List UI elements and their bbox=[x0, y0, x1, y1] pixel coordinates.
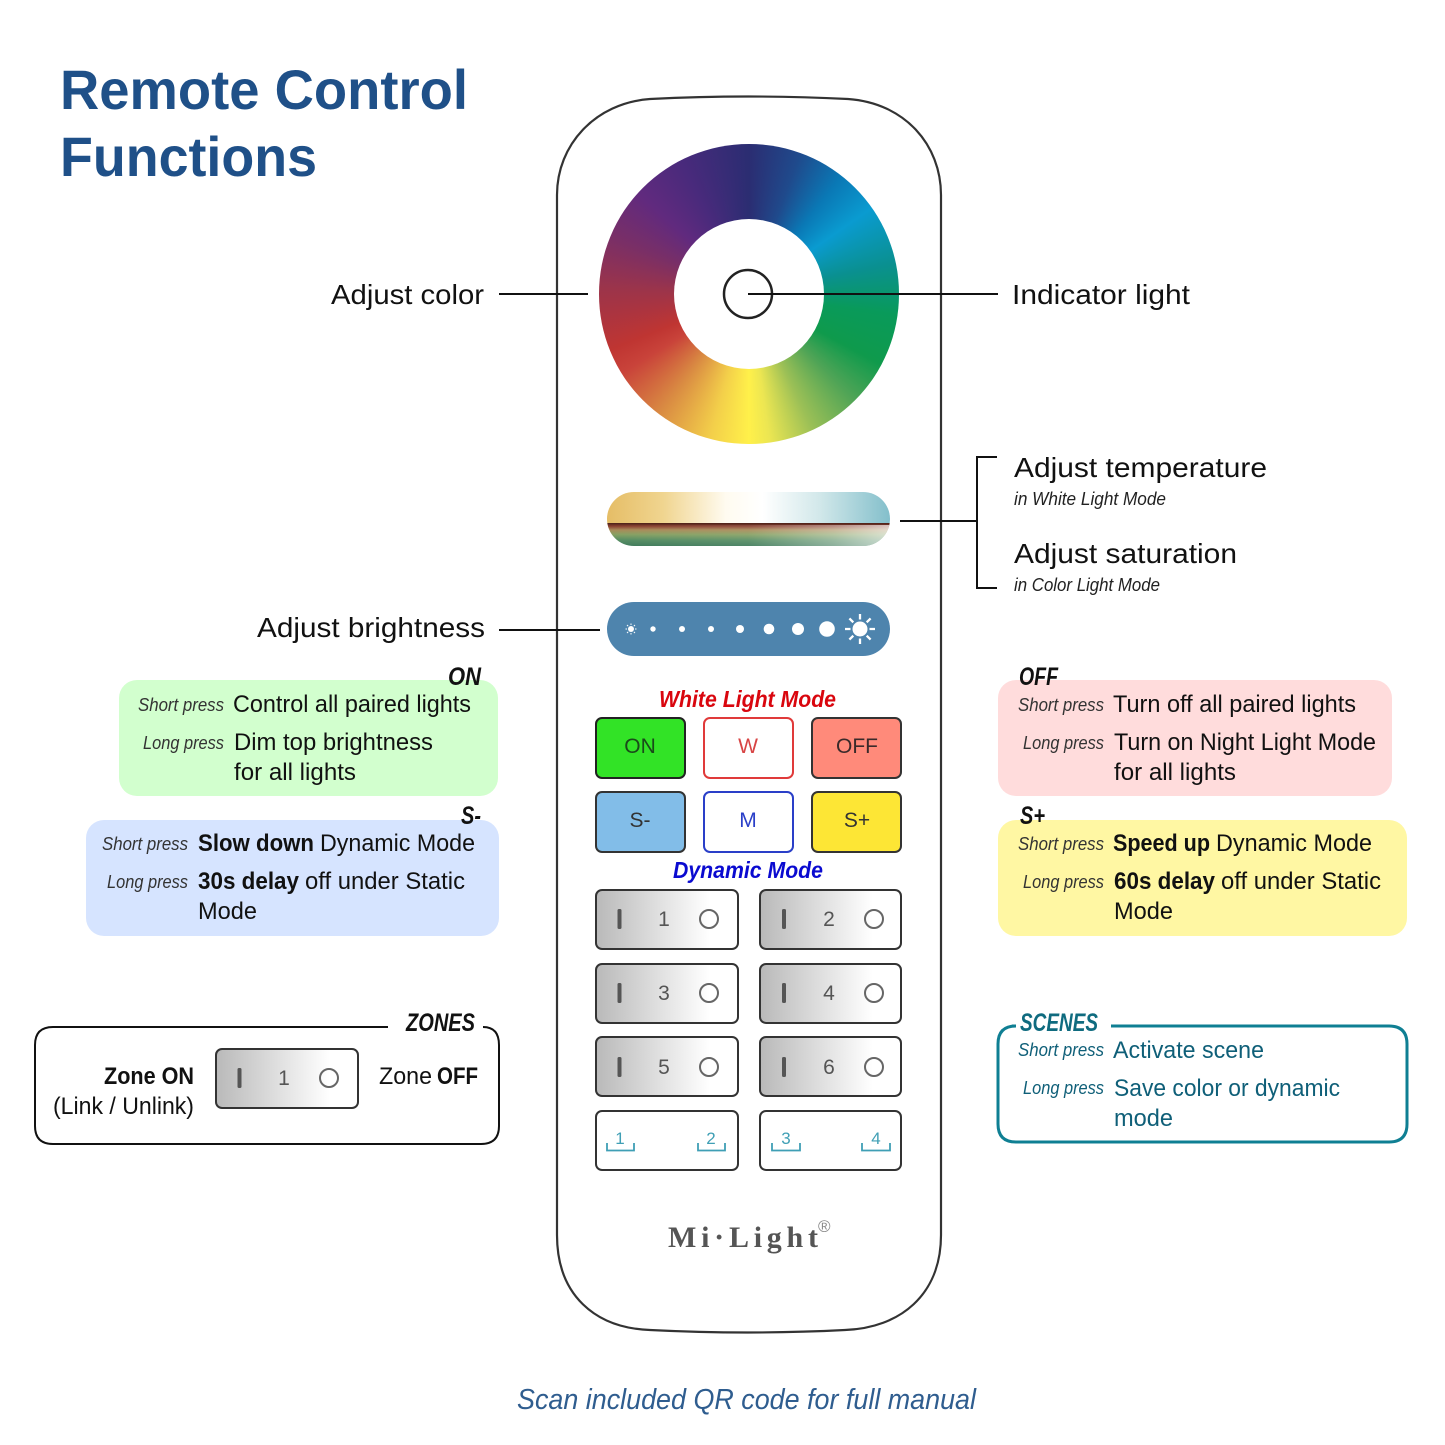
callout: adjust color: Adjust color bbox=[331, 279, 484, 310]
panel: S-: 30s delay bbox=[198, 868, 300, 895]
button: ON bbox=[596, 718, 685, 778]
panel: S-: Mode bbox=[198, 898, 257, 925]
panel: ON: Long press bbox=[143, 733, 224, 753]
button: zone 3 bbox=[596, 964, 738, 1023]
panel: S+: S+ bbox=[1020, 802, 1045, 830]
panel: S+: Short press bbox=[1018, 834, 1104, 854]
panel: scenes: SCENES bbox=[1020, 1009, 1098, 1037]
panel: S+: Mode bbox=[1114, 898, 1173, 925]
remote control body bbox=[557, 96, 941, 1332]
callout: adjust brightness: Adjust brightness bbox=[257, 612, 485, 643]
button: zone 2 bbox=[760, 890, 901, 949]
panel: zones: (Link / Unlink) bbox=[53, 1093, 194, 1120]
panel: ON bbox=[119, 663, 498, 796]
button: S-: S- bbox=[630, 809, 651, 832]
panel: zones: Zone ON bbox=[104, 1063, 194, 1090]
title bbox=[60, 58, 468, 188]
panel: S- bbox=[86, 802, 499, 936]
panel: zones: 1 bbox=[278, 1067, 290, 1090]
brand logo: Mi·Light bbox=[668, 1221, 818, 1254]
title: Functions bbox=[60, 125, 317, 188]
panel: scenes bbox=[998, 1009, 1407, 1142]
button: zone 1 bbox=[596, 890, 738, 949]
panel: ON: Control all paired lights bbox=[233, 691, 471, 718]
panel: ON: for all lights bbox=[234, 759, 356, 786]
heading: white light mode: White Light Mode bbox=[659, 686, 836, 712]
panel: S+: off under Static bbox=[1221, 868, 1381, 895]
panel: ON: Dim top brightness bbox=[234, 729, 433, 756]
button: W: W bbox=[738, 735, 758, 758]
button: scenes 3 and 4 bbox=[760, 1111, 901, 1170]
panel: scenes: Save color or dynamic bbox=[1114, 1075, 1340, 1102]
panel: scenes: Long press bbox=[1023, 1078, 1104, 1098]
button: S+: S+ bbox=[844, 809, 870, 832]
button: W bbox=[704, 718, 793, 778]
panel: S-: Dynamic Mode bbox=[320, 830, 475, 857]
panel: S-: S- bbox=[461, 802, 481, 830]
button: scenes 1 and 2: 2 bbox=[706, 1129, 716, 1148]
panel: ON: Short press bbox=[138, 695, 224, 715]
button: zone 5 bbox=[596, 1037, 738, 1096]
icon: indicator light bbox=[724, 270, 772, 318]
panel: S-: Long press bbox=[107, 872, 188, 892]
callout: adjust temperature and saturation: in Color Light Mode bbox=[1014, 575, 1160, 595]
panel: zones bbox=[35, 1009, 499, 1144]
footer note: Scan included QR code for full manual bbox=[517, 1384, 977, 1416]
button: ON: ON bbox=[624, 735, 656, 758]
panel: zones: ZONES bbox=[405, 1009, 475, 1037]
callout: adjust temperature and saturation: Adjust saturation bbox=[1014, 538, 1237, 569]
panel: OFF: Long press bbox=[1023, 733, 1104, 753]
button: zone 1: 1 bbox=[658, 908, 670, 931]
panel: S+: Dynamic Mode bbox=[1216, 830, 1372, 857]
callout: indicator light: Indicator light bbox=[1012, 279, 1190, 310]
callout: adjust temperature and saturation bbox=[900, 452, 1267, 595]
panel: OFF: for all lights bbox=[1114, 759, 1236, 786]
button: scenes 3 and 4: 4 bbox=[871, 1129, 881, 1148]
panel: S+ bbox=[998, 802, 1407, 936]
panel: S+: Speed up bbox=[1113, 830, 1210, 857]
button: S+ bbox=[812, 792, 901, 852]
heading: dynamic mode: Dynamic Mode bbox=[673, 857, 823, 883]
panel: S-: off under Static bbox=[305, 868, 465, 895]
button: zone 2: 2 bbox=[823, 908, 835, 931]
panel: S+: 60s delay bbox=[1114, 868, 1216, 895]
panel: OFF: Turn off all paired lights bbox=[1113, 691, 1356, 718]
panel: zones: OFF bbox=[437, 1063, 478, 1090]
panel: S-: Slow down bbox=[198, 830, 314, 857]
temperature and saturation bar bbox=[607, 492, 890, 546]
button: scenes 1 and 2 bbox=[596, 1111, 738, 1170]
button: zone 6: 6 bbox=[823, 1056, 835, 1079]
callout: adjust temperature and saturation: in White Light Mode bbox=[1014, 489, 1166, 509]
button: M: M bbox=[739, 809, 757, 832]
button: scenes 1 and 2: 1 bbox=[615, 1129, 625, 1148]
button: zone 3: 3 bbox=[658, 982, 670, 1005]
button: zone 4: 4 bbox=[823, 982, 835, 1005]
brightness bar bbox=[607, 602, 890, 656]
panel: zones: Zone bbox=[379, 1063, 432, 1090]
panel: OFF: OFF bbox=[1019, 663, 1059, 691]
button: M bbox=[704, 792, 793, 852]
panel: S+: Long press bbox=[1023, 872, 1104, 892]
panel: ON: ON bbox=[448, 663, 482, 691]
button: scenes 3 and 4: 3 bbox=[781, 1129, 791, 1148]
panel: scenes: Short press bbox=[1018, 1040, 1104, 1060]
panel: scenes: Activate scene bbox=[1113, 1037, 1264, 1064]
panel: OFF: Turn on Night Light Mode bbox=[1114, 729, 1376, 756]
button: OFF: OFF bbox=[836, 735, 878, 758]
button: S- bbox=[596, 792, 685, 852]
button: zone 4 bbox=[760, 964, 901, 1023]
button: zone 5: 5 bbox=[658, 1056, 670, 1079]
brand logo: ® bbox=[818, 1217, 831, 1236]
title: Remote Control bbox=[60, 58, 468, 121]
panel: OFF: Short press bbox=[1018, 695, 1104, 715]
panel: S-: Short press bbox=[102, 834, 188, 854]
icon: color wheel bbox=[599, 144, 898, 444]
callout: adjust temperature and saturation: Adjust temperature bbox=[1014, 452, 1267, 483]
panel: scenes: mode bbox=[1114, 1105, 1173, 1132]
button: zone 6 bbox=[760, 1037, 901, 1096]
button: OFF bbox=[812, 718, 901, 778]
panel: OFF bbox=[998, 663, 1392, 796]
